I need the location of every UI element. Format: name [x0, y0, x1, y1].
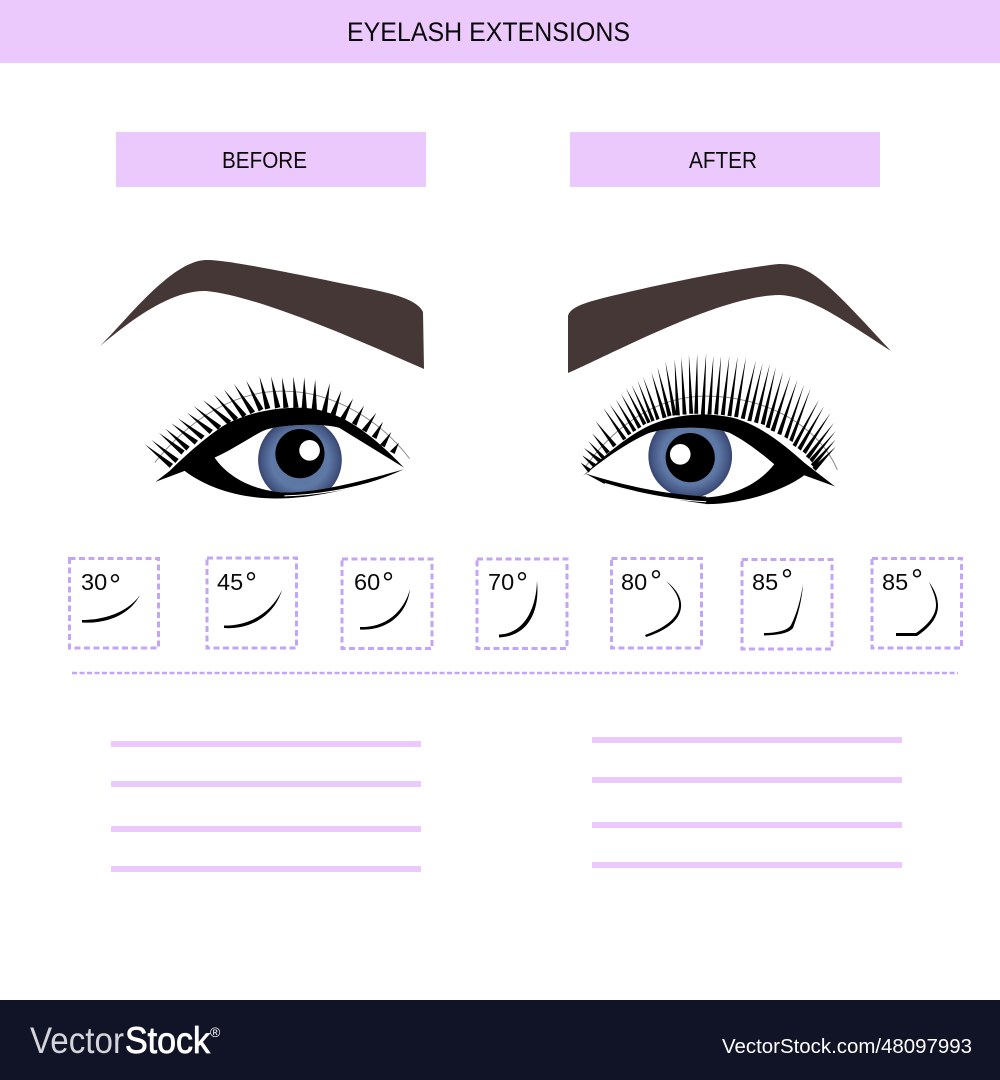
panel: 30 degree curl: 30: [81, 569, 107, 595]
panel: 80 degree curl: 80: [621, 569, 647, 595]
icon: after eye: [581, 353, 837, 504]
dashed divider: [72, 672, 958, 674]
panel: 85 degree curl, second shape: °: [911, 564, 923, 597]
heading: after: AFTER: [689, 147, 757, 173]
footer bar: [0, 1000, 1000, 1080]
panel: 60 degree curl: °: [382, 567, 394, 600]
icon: right eyebrow: [568, 264, 891, 373]
panel: 85 degree curl: °: [781, 564, 793, 597]
panel: 45 degree curl: 45: [217, 569, 243, 595]
note lines: after: [592, 737, 902, 868]
heading: before: BEFORE: [222, 147, 307, 173]
heading: before: [116, 132, 426, 187]
title banner: [0, 0, 1000, 63]
title banner: EYELASH EXTENSIONS: [347, 17, 630, 47]
panel: 80 degree curl: [612, 558, 702, 648]
note lines: before: [111, 741, 421, 872]
panel: 85 degree curl: 85: [752, 569, 778, 595]
heading: after: [570, 132, 880, 187]
panel: 85 degree curl: [742, 560, 832, 649]
icon: before eye: [145, 376, 410, 502]
icon: left eyebrow: [100, 260, 424, 369]
panel: 30 degree curl: [70, 558, 158, 648]
panel: 45 degree curl: °: [245, 567, 257, 600]
panel: 70 degree curl: [477, 559, 567, 648]
panel: 60 degree curl: 60: [354, 569, 380, 595]
footer bar: Vector: [30, 1020, 124, 1061]
panel: 85 degree curl, second shape: [872, 558, 962, 648]
footer bar: VectorStock.com/48097993: [722, 1036, 972, 1058]
panel: 30 degree curl: °: [109, 569, 121, 602]
footer bar: ®: [210, 1024, 221, 1040]
footer bar: Stock: [125, 1020, 210, 1061]
panel: 70 degree curl: °: [516, 567, 528, 600]
panel: 80 degree curl: °: [650, 565, 662, 598]
panel: 85 degree curl, second shape: 85: [882, 569, 908, 595]
panel: 70 degree curl: 70: [488, 569, 514, 595]
panel: 60 degree curl: [342, 559, 432, 648]
panel: 45 degree curl: [207, 558, 296, 648]
